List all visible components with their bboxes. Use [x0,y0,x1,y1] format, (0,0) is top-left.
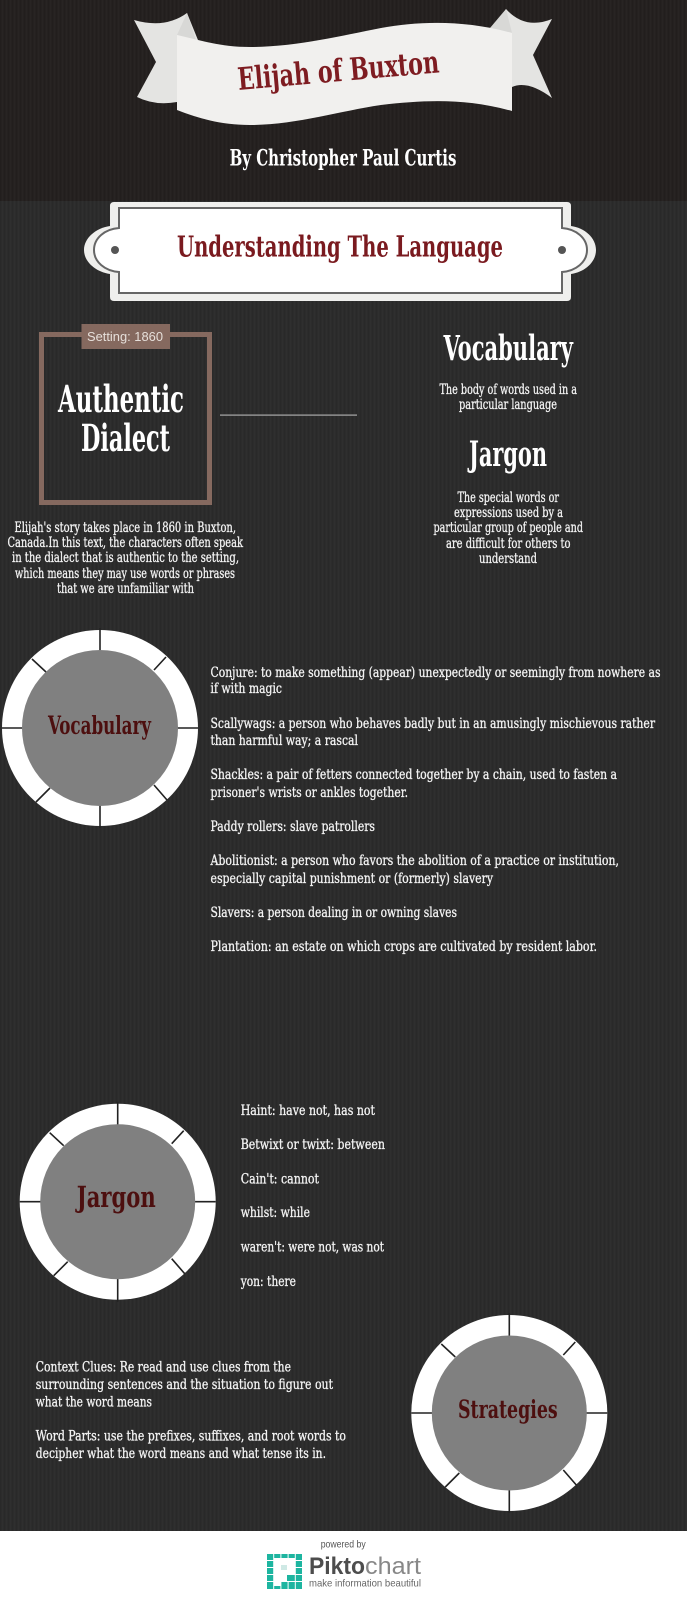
panel: authentic dialect frame [42,324,210,502]
jargon definition: The special words or [458,490,560,506]
circle badge: jargon [20,1102,216,1302]
badge label: Strategies [458,1395,558,1424]
frame heading: Authentic [57,377,184,421]
dialect description: Canada.In this text, the characters often speak [8,535,243,551]
strategies text: surrounding sentences and the situation to figure out [36,1377,333,1393]
jargon word list: Cain't: cannot [241,1171,319,1187]
wordmark: chart [365,1553,421,1580]
author line: By Christopher Paul Curtis [230,146,456,172]
circle badge: strategies [411,1313,607,1513]
footer: powered by piktochart [0,1531,687,1600]
strategies text [36,1360,346,1462]
icon: piktochart logo [267,1554,302,1589]
wordmark: make information beautiful [309,1578,421,1590]
strategies text: what the word means [36,1395,152,1411]
frame heading [57,377,184,460]
jargon definition: understand [479,551,537,567]
title ribbon [134,9,552,125]
vocabulary word list: Slavers: a person dealing in or owning slaves [210,905,457,921]
jargon word list [240,1103,385,1290]
jargon definition [434,490,583,567]
vocabulary word list: Abolitionist: a person who favors the abolition of a practice or institution, [210,853,619,869]
vocabulary definition [440,382,577,413]
strategies text: decipher what the word means and what tense its in. [36,1446,326,1462]
strategies text: Context Clues: Re read and use clues from the [36,1360,291,1376]
setting tag [82,324,170,349]
vocabulary word list: Paddy rollers: slave patrollers [210,819,375,835]
frame heading: Dialect [81,416,170,460]
jargon word list: Haint: have not, has not [241,1103,375,1119]
vocabulary word list: Shackles: a pair of fetters connected together by a chain, used to fasten a [210,767,617,783]
badge label: Jargon [75,1180,156,1214]
wordmark: Pikto [309,1553,365,1580]
wordmark [309,1553,421,1590]
vocabulary definition: particular language [459,397,557,413]
vocabulary word list: especially capital punishment or (formerly) slavery [210,871,494,887]
jargon word list: Betwixt or twixt: between [241,1137,385,1153]
strategies text: Word Parts: use the prefixes, suffixes, and root words to [36,1429,346,1445]
vocabulary word list: than harmful way; a rascal [210,733,358,749]
vocabulary word list [210,665,660,955]
dialect description [8,520,243,597]
connector line [220,414,357,416]
dialect description: in the dialect that is authentic to the setting, [12,550,239,566]
jargon definition: particular group of people and [434,520,583,536]
title text: Elijah of Buxton [236,45,441,98]
powered by: powered by [321,1539,366,1551]
jargon word list: waren't: were not, was not [241,1240,384,1256]
circle badge: vocabulary [2,628,198,828]
plaque: understanding the language [84,202,596,301]
vocabulary word list: prisoner's wrists or ankles together. [210,785,408,801]
jargon definition: are difficult for others to [446,536,570,552]
jargon word list: yon: there [240,1274,296,1290]
dialect description: which means they may use words or phrases [15,566,235,582]
vocabulary word list: if with magic [210,681,282,697]
jargon word list: whilst: while [241,1205,310,1221]
jargon heading: Jargon [467,434,547,475]
badge label: Vocabulary [47,711,152,740]
jargon definition: expressions used by a [454,505,563,521]
vocabulary definition: The body of words used in a [440,382,577,398]
plaque heading: Understanding The Language [177,230,503,264]
vocabulary heading: Vocabulary [443,328,574,369]
dialect description: Elijah's story takes place in 1860 in Buxton, [14,520,236,536]
setting tag: Setting: 1860 [87,329,163,344]
dialect description: that we are unfamiliar with [57,581,194,597]
vocabulary word list: Plantation: an estate on which crops are cultivated by resident labor. [210,939,597,955]
